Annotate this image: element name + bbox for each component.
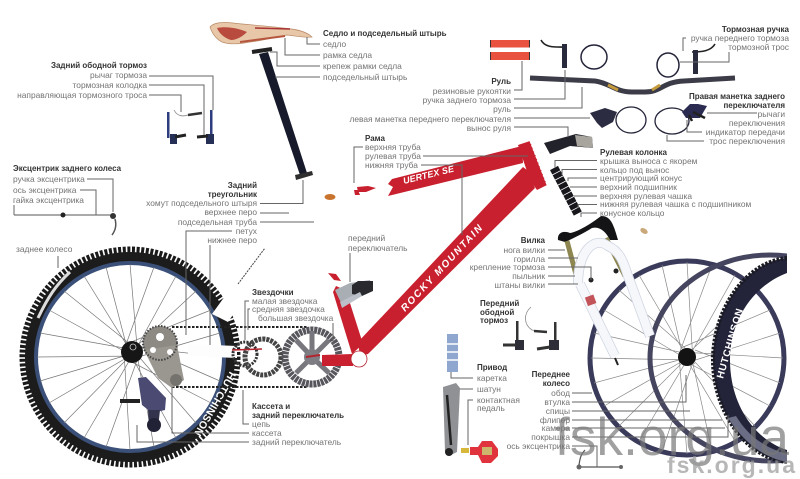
clipless pedal	[461, 441, 498, 463]
label group: right rear shifter: индикатор передачи	[706, 127, 785, 137]
headset stack and fork crown	[554, 168, 618, 242]
watermark: fsk.org.ua	[667, 452, 795, 478]
label group: front wheel: флипер	[540, 415, 570, 425]
label group: headset: крышка выноса с якорем	[600, 156, 698, 166]
label group: rear quick release: ручка эксцентрика	[13, 174, 85, 184]
seatpost	[252, 49, 313, 180]
rear derailleur	[120, 377, 166, 432]
label: rear wheel	[16, 244, 73, 268]
label group: fork: нога вилки	[504, 245, 545, 255]
saddle	[210, 22, 312, 44]
label group: fork: штаны вилки	[495, 280, 545, 290]
front wheel	[590, 255, 800, 462]
label group: fork: горилла	[514, 254, 545, 264]
label: front derailleur: передний	[348, 233, 386, 243]
label group: frame: нижняя труба	[365, 160, 418, 170]
label group: rear quick release: гайка эксцентрика	[13, 195, 84, 205]
label group: headset: конусное кольцо	[600, 208, 665, 218]
label group: right rear shifter: переключателя	[723, 101, 785, 110]
label group: frame: рулевая труба	[365, 151, 421, 161]
label group: front wheel: ось эксцентрика	[507, 441, 570, 451]
label group: rear quick release: Эксцентрик заднего колеса	[13, 164, 122, 173]
chain	[172, 327, 308, 387]
label: front derailleur	[348, 233, 408, 282]
label group: handlebar: Руль	[491, 77, 511, 86]
stem	[544, 134, 593, 154]
label group: brake lever: Тормозная ручка	[722, 25, 790, 34]
label group: headset: Рулевая колонка	[600, 148, 668, 157]
frame: UERTEX SE	[402, 163, 456, 186]
label group: rear triangle: Задний	[228, 181, 257, 190]
chainrings	[232, 330, 339, 384]
front brake lever	[657, 44, 715, 77]
label group: drivetrain: Привод	[477, 363, 507, 372]
rear quick release	[14, 212, 116, 235]
label group: headset: центрирующий конус	[600, 173, 682, 183]
label group: front wheel: втулка	[544, 397, 570, 407]
label group: drivetrain: педаль	[477, 403, 505, 413]
label group: fork: пыльник	[512, 271, 545, 281]
label group: fork	[470, 236, 591, 290]
label group: handlebar: резиновые рукоятки	[433, 86, 511, 96]
cassette	[143, 326, 184, 388]
label group: rear quick release: ось эксцентрика	[13, 185, 77, 195]
label: rear wheel: заднее колесо	[16, 244, 73, 254]
label group: drivetrain: шатун	[477, 384, 501, 394]
label group: rear triangle: петух	[236, 226, 258, 236]
right shifter	[655, 104, 707, 134]
label: front rim brake: тормоз	[480, 316, 508, 325]
handlebar	[530, 78, 735, 92]
label group: handlebar: левая манетка переднего переключателя	[350, 114, 511, 124]
label group: saddle and seatpost: седло	[323, 39, 347, 49]
label group: cassette and rear derailleur: цепь	[252, 419, 271, 429]
headset bolts	[639, 227, 649, 235]
label group: frame	[354, 134, 528, 235]
watermark: fsk.org.ua	[555, 408, 790, 467]
label group: brake lever: ручка переднего тормоза	[691, 33, 789, 43]
label group: chainrings: большая звездочка	[258, 313, 334, 323]
label group: front wheel: покрышка	[531, 432, 570, 442]
label group: brake lever: тормозной трос	[728, 42, 789, 52]
label group: cassette and rear derailleur: Кассета и	[252, 402, 290, 411]
rear brake lever	[541, 40, 607, 69]
label group: headset: верхний подшипник	[600, 182, 677, 192]
label group: chainrings: средняя звездочка	[252, 304, 325, 314]
label group: front wheel: колесо	[543, 379, 570, 388]
rear wheel	[23, 250, 238, 464]
label group: handlebar	[350, 61, 590, 137]
label group: rear rim brake	[17, 61, 213, 135]
front quick release	[576, 450, 623, 470]
label group: cassette and rear derailleur: задний переключатель	[252, 437, 342, 447]
bottom bracket	[447, 334, 458, 372]
label group: cassette and rear derailleur: кассета	[252, 428, 282, 438]
label group: right rear shifter: Правая манетка заднего	[689, 92, 785, 101]
label group: headset: нижняя рулевая чашка с подшипником	[600, 199, 752, 209]
label group: right rear shifter	[667, 92, 785, 146]
label group: drivetrain: каретка	[477, 373, 507, 383]
label group: saddle and seatpost: рамка седла	[323, 50, 372, 60]
label group: headset: кольцо под вынос	[600, 165, 669, 175]
label group: cassette and rear derailleur: задний переключатель	[252, 411, 344, 420]
label group: rear triangle: нижнее перо	[207, 235, 257, 245]
front rim brake	[503, 307, 559, 350]
label group: chainrings: малая звездочка	[252, 296, 318, 306]
frame: ROCKY MOUNTAIN	[399, 223, 485, 314]
label group: rear triangle	[146, 180, 314, 345]
label group: handlebar: ручка заднего тормоза	[423, 95, 511, 105]
front wheel: HUTCHINSON	[715, 308, 746, 380]
label group: right rear shifter: трос переключения	[709, 136, 785, 146]
label group: chainrings	[245, 288, 334, 345]
handlebar grips	[490, 40, 530, 60]
label group: saddle and seatpost: крепеж рамки седла	[323, 61, 402, 71]
rear rim brake	[167, 110, 214, 144]
label group: rear rim brake: направляющая тормозного троса	[17, 90, 147, 100]
label: front rim brake: Передний	[480, 299, 519, 308]
label: front derailleur: переключатель	[348, 243, 408, 253]
rear wheel: HUTCHINSON	[191, 370, 238, 438]
label group: right rear shifter: рычаги	[758, 109, 785, 119]
rear triangle (white stays)	[188, 205, 318, 358]
label: front rim brake: ободной	[480, 308, 514, 317]
front derailleur	[340, 281, 373, 308]
label group: headset	[555, 148, 752, 218]
label group: rear triangle: подседельная труба	[178, 217, 257, 227]
label: front rim brake	[480, 299, 519, 325]
label group: rear rim brake: Задний ободной тормоз	[51, 61, 147, 70]
label group: handlebar: руль	[493, 104, 512, 114]
label group: fork: Вилка	[521, 236, 546, 245]
label group: drivetrain: контактная	[477, 395, 520, 405]
label group: rear quick release	[13, 164, 122, 215]
label group: cassette and rear derailleur	[137, 387, 344, 447]
label group: saddle and seatpost	[270, 29, 447, 82]
label group: front wheel: камера	[542, 423, 570, 433]
label group: front wheel: обод	[551, 388, 570, 398]
label group: rear rim brake: тормозная колодка	[73, 80, 147, 90]
label group: fork: крепление тормоза	[470, 262, 545, 272]
label group: headset: верхняя рулевая чашка	[600, 191, 692, 201]
crank arm	[443, 383, 460, 456]
label group: rear triangle: треугольник	[208, 190, 258, 199]
front tyre	[713, 258, 787, 462]
label group: handlebar: вынос руля	[467, 123, 511, 133]
label group: rear triangle: верхнее перо	[204, 207, 257, 217]
label group: front wheel: спицы	[546, 406, 570, 416]
label group: right rear shifter: переключения	[729, 118, 785, 128]
label group: frame: Рама	[365, 134, 385, 143]
label group: rear triangle: хомут подседельного штыря	[146, 198, 257, 208]
fork	[567, 238, 650, 365]
label group: brake lever	[680, 25, 790, 62]
left shifter	[590, 107, 646, 133]
label group: front wheel: Переднее	[532, 370, 571, 379]
label group: front wheel	[507, 370, 728, 467]
label group: rear rim brake: рычаг тормоза	[90, 70, 147, 80]
label group: frame: верхняя труба	[365, 142, 421, 152]
label group: drivetrain	[451, 363, 520, 445]
label group: chainrings: Звездочки	[252, 288, 294, 297]
frame	[322, 141, 547, 367]
label group: saddle and seatpost: подседельный штырь	[323, 72, 408, 82]
label group: saddle and seatpost: Седло и подседельный штырь	[323, 29, 447, 38]
